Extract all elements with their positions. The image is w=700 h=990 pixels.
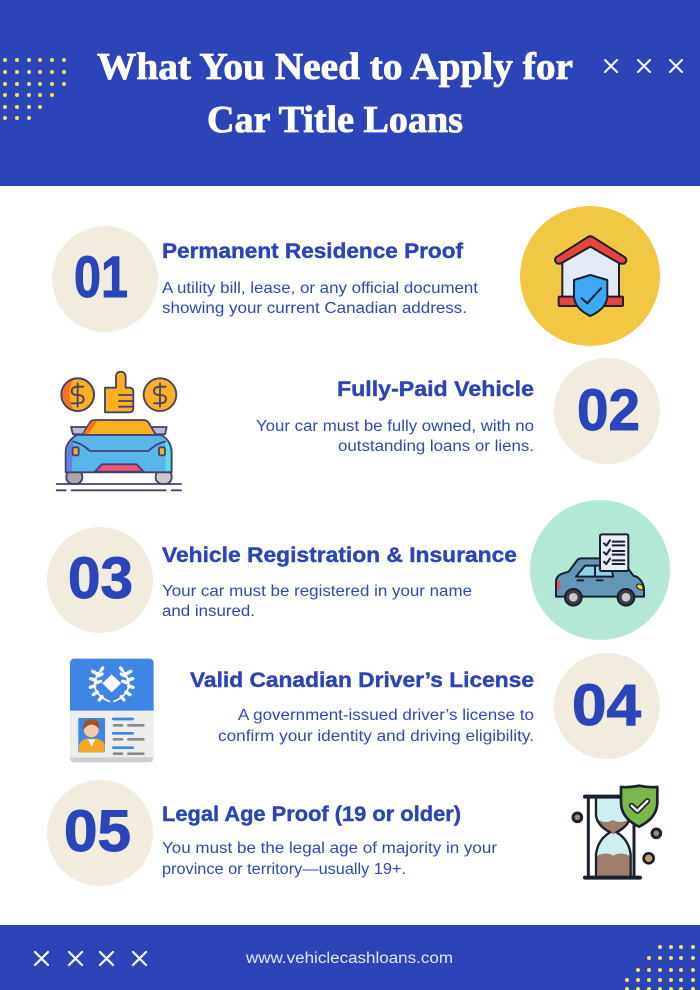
header title (97, 46, 573, 141)
step 05: legal age proof (47, 780, 661, 886)
description 01 (162, 280, 479, 317)
icon: car with coins and thumbs up (57, 372, 181, 490)
description 02 (256, 418, 534, 455)
number badge 03 (47, 527, 153, 633)
description 02: outstanding loans or liens. (338, 438, 534, 455)
number badge 05: 05 (64, 799, 131, 864)
step 03: vehicle registration and insurance (47, 500, 670, 640)
number badge 01: 01 (74, 245, 128, 310)
description 03: and insured. (162, 603, 255, 620)
footer banner (0, 925, 700, 990)
description 04: confirm your identity and driving eligibility. (218, 728, 534, 745)
header title: Car Title Loans (207, 99, 463, 141)
number badge 02 (554, 358, 660, 464)
number badge 03: 03 (68, 546, 133, 611)
footer website address: www.vehiclecashloans.com (245, 950, 453, 967)
number badge 02: 02 (577, 378, 640, 443)
heading 02: Fully-Paid Vehicle (337, 378, 534, 401)
description 03: Your car must be registered in your name (162, 583, 472, 600)
description 01: showing your current Canadian address. (162, 300, 467, 317)
icon: house with shield (520, 206, 660, 346)
number badge 04 (554, 653, 660, 759)
header cross marks (605, 60, 682, 72)
step 04: valid canadian driver's license (70, 653, 660, 762)
description 04: A government-issued driver’s license to (238, 707, 534, 724)
heading 01: Permanent Residence Proof (162, 240, 464, 263)
icon: hourglass with shield (573, 786, 661, 878)
heading 05: Legal Age Proof (19 or older) (162, 803, 461, 826)
description 05: province or territory—usually 19+. (162, 861, 406, 878)
description 02: Your car must be fully owned, with no (256, 418, 534, 435)
description 05: You must be the legal age of majority in your (162, 840, 497, 857)
description 04 (218, 707, 534, 745)
header dot pattern (3, 58, 66, 120)
description 05 (162, 840, 497, 878)
description 03 (162, 583, 472, 620)
header title: What You Need to Apply for (97, 46, 573, 88)
footer cross marks (35, 952, 146, 965)
description 01: A utility bill, lease, or any official document (162, 280, 479, 297)
heading 03: Vehicle Registration & Insurance (162, 544, 517, 567)
icon: driver's license card (70, 659, 154, 762)
footer dot pattern (625, 945, 695, 990)
number badge 01 (52, 226, 158, 332)
number badge 04: 04 (572, 673, 641, 738)
heading 04: Valid Canadian Driver’s License (190, 669, 534, 692)
step 02: fully-paid vehicle (57, 358, 660, 490)
number badge 05 (47, 780, 153, 886)
icon: car with checklist (530, 500, 670, 640)
step 01: permanent residence proof (52, 206, 660, 346)
header banner (0, 0, 700, 186)
